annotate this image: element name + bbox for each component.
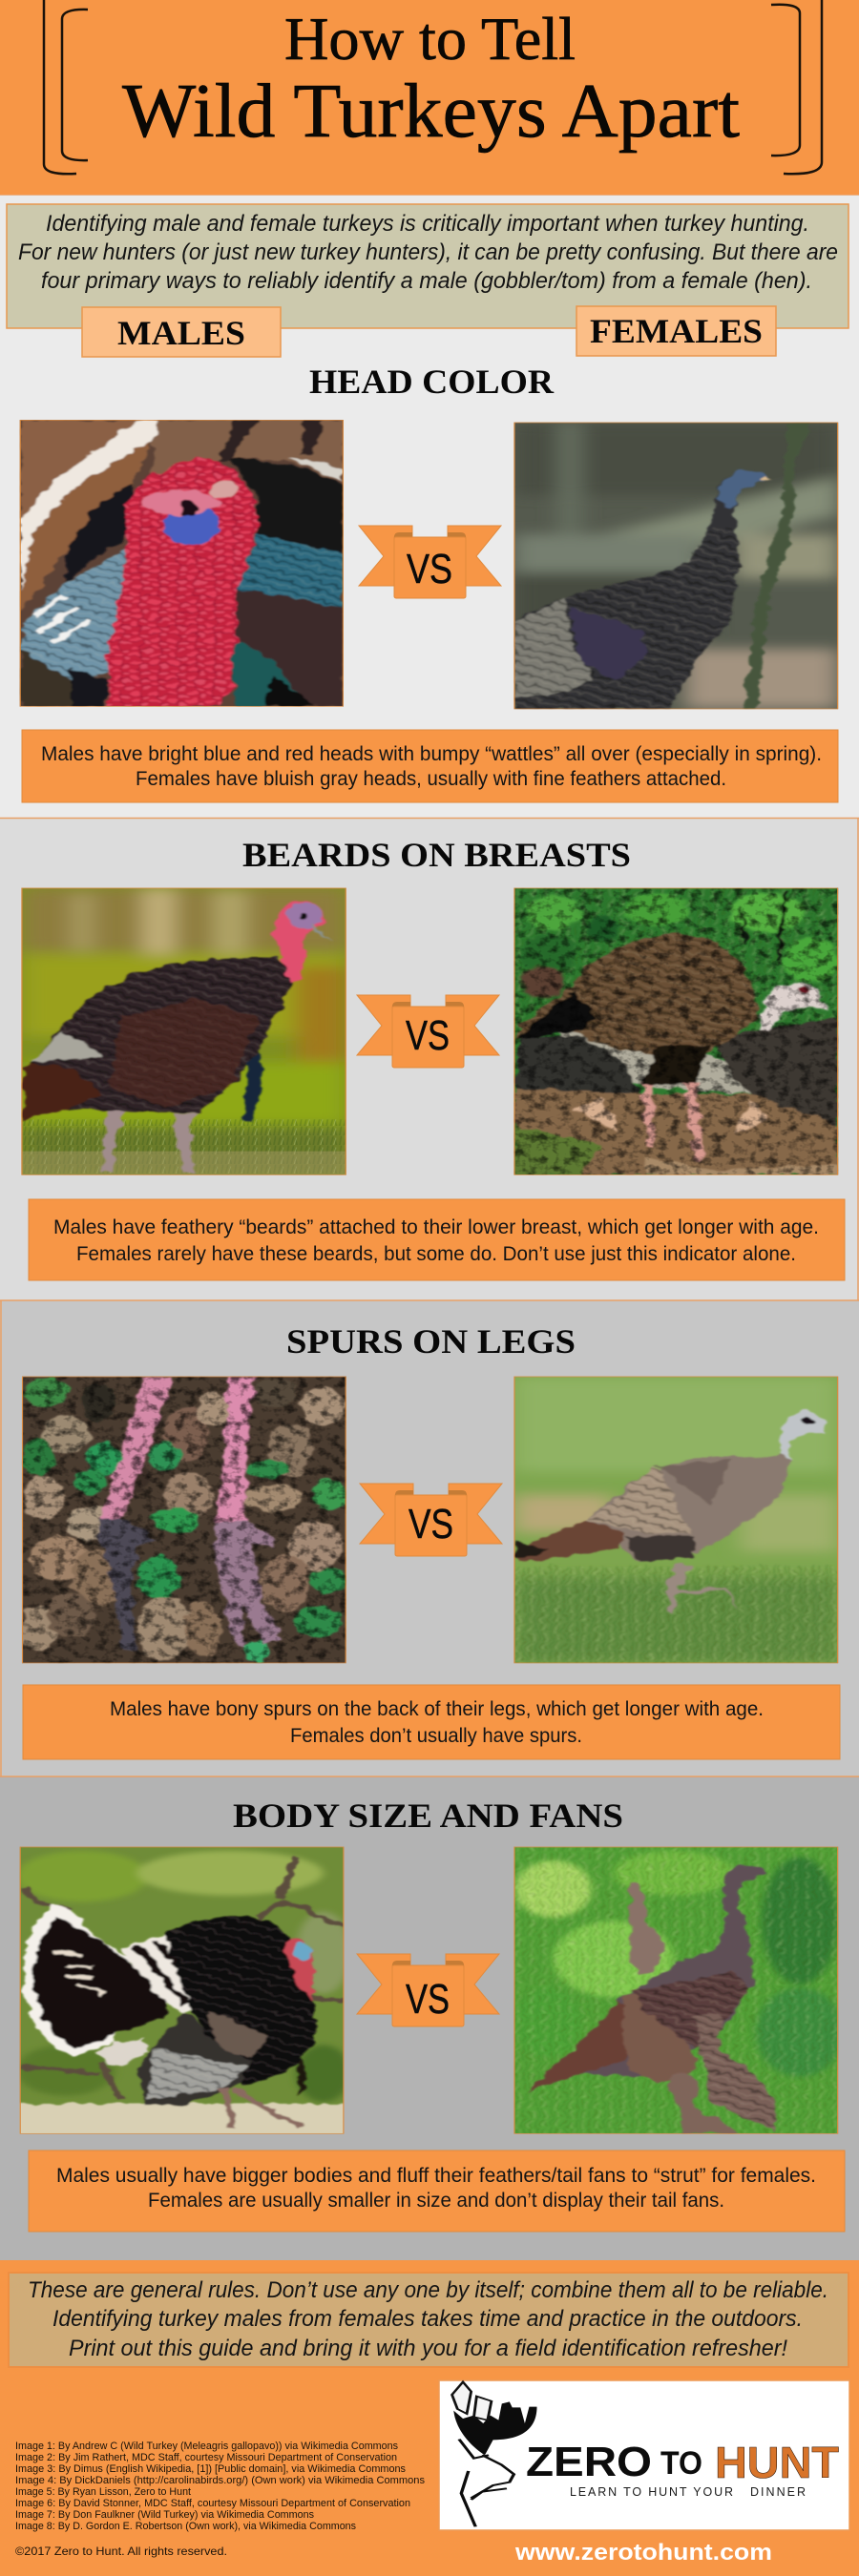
closing advice panel xyxy=(9,2273,849,2367)
vs ribbon xyxy=(357,1954,499,2026)
heading: body size: BODY SIZE AND FANS xyxy=(233,1797,623,1835)
photo border xyxy=(513,1377,838,1663)
photo: male turkey standing xyxy=(21,888,346,1175)
caption: body size: Females are usually smaller in size and don’t display their tail fans. xyxy=(148,2190,724,2212)
males label: MALES xyxy=(117,314,245,352)
image credits: Image 2: By Jim Rathert, MDC Staff, courtesy Missouri Department of Conservation xyxy=(15,2452,397,2463)
photo border xyxy=(513,1847,838,2134)
header banner xyxy=(0,0,859,195)
vs ribbon: VS xyxy=(409,1501,453,1548)
logo panel: LEARN TO HUNT YOUR xyxy=(570,2485,733,2499)
logo panel: TO xyxy=(660,2445,702,2482)
image credits xyxy=(15,2441,425,2532)
logo panel xyxy=(439,2380,849,2530)
intro panel: four primary ways to reliably identify a male (gobbler/tom) from a female (hen). xyxy=(41,268,812,294)
website url: www.zerotohunt.com xyxy=(514,2540,772,2566)
image credits: Image 3: By Dimus (English Wikipedia, [1]) [Public domain], via Wikimedia Commons xyxy=(15,2463,406,2475)
females label xyxy=(576,306,776,356)
photo border xyxy=(20,420,344,707)
intro panel: Identifying male and female turkeys is critically important when turkey hunting. xyxy=(46,211,809,237)
closing advice panel: Identifying turkey males from females takes time and practice in the outdoors. xyxy=(52,2306,803,2332)
caption: body size xyxy=(29,2150,845,2232)
intro panel: For new hunters (or just new turkey hunters), it can be pretty confusing. But there are xyxy=(18,239,838,265)
closing advice panel: Print out this guide and bring it with you for a field identification refresher! xyxy=(69,2336,787,2361)
image credits: Image 7: By Don Faulkner (Wild Turkey) via Wikimedia Commons xyxy=(15,2509,314,2521)
leaf mottling xyxy=(22,1377,346,1663)
photo: turkey legs with spurs xyxy=(20,1377,347,1663)
photo border xyxy=(22,1377,346,1663)
icon: deer with skyline antlers xyxy=(452,2382,537,2526)
intro panel xyxy=(7,204,849,328)
image credits: Image 5: By Ryan Lisson, Zero to Hunt xyxy=(15,2486,191,2498)
caption: beards: Females rarely have these beards, but some do. Don’t use just this indicator alone. xyxy=(76,1243,796,1265)
caption: head color: Males have bright blue and red heads with bumpy “wattles” all over (especially in spring). xyxy=(41,743,822,765)
caption: spurs: Females don’t usually have spurs. xyxy=(290,1725,582,1747)
photo border xyxy=(513,423,838,709)
title line 2: Wild Turkeys Apart xyxy=(122,70,740,154)
logo panel: HUNT xyxy=(715,2438,839,2487)
image credits: Image 1: By Andrew C (Wild Turkey (Meleagris gallopavo)) via Wikimedia Commons xyxy=(15,2441,398,2452)
heading: head color: HEAD COLOR xyxy=(309,363,555,401)
vs ribbon: VS xyxy=(407,546,452,592)
photo border xyxy=(513,888,838,1175)
heading: spurs: SPURS ON LEGS xyxy=(286,1322,576,1361)
closing advice panel: These are general rules. Don’t use any one by itself; combine them all to be reliable. xyxy=(28,2277,828,2303)
caption: head color xyxy=(22,730,838,802)
vs ribbon: VS xyxy=(406,1976,450,2023)
vs ribbon: VS xyxy=(406,1012,450,1059)
photo border xyxy=(21,888,346,1175)
photo: female turkey foraging xyxy=(513,888,838,1175)
image credits: Image 4: By DickDaniels (http://carolinabirds.org/) (Own work) via Wikimedia Commons xyxy=(15,2475,425,2486)
caption: spurs xyxy=(23,1685,840,1759)
image credits: Image 6: By David Stonner, MDC Staff, courtesy Missouri Department of Conservation xyxy=(15,2498,410,2509)
image credits: Image 8: By D. Gordon E. Robertson (Own work), via Wikimedia Commons xyxy=(15,2521,356,2532)
caption: beards xyxy=(29,1199,845,1280)
females label: FEMALES xyxy=(590,312,763,350)
photo: strutting male xyxy=(19,1847,344,2134)
males label xyxy=(82,307,281,357)
photo: female turkey neck and head xyxy=(513,423,838,709)
photo: hen with poults xyxy=(513,1847,844,2134)
leaf mottling xyxy=(513,888,838,1175)
decorative brackets xyxy=(44,0,822,174)
photo border xyxy=(20,1847,344,2134)
caption: beards: Males have feathery “beards” attached to their lower breast, which get longer with age. xyxy=(53,1216,819,1238)
vs ribbon xyxy=(360,1484,502,1556)
copyright: ©2017 Zero to Hunt. All rights reserved. xyxy=(15,2545,227,2558)
logo panel: DINNER xyxy=(750,2485,806,2499)
caption: head color: Females have bluish gray heads, usually with fine feathers attached. xyxy=(136,768,726,790)
photo: male turkey head xyxy=(20,420,344,707)
vs ribbon xyxy=(359,526,501,598)
caption: body size: Males usually have bigger bodies and fluff their feathers/tail fans to “strut” for females. xyxy=(56,2165,816,2187)
logo wordmark: ZERO xyxy=(526,2439,652,2485)
title line 1: How to Tell xyxy=(284,5,576,73)
caption: spurs: Males have bony spurs on the back of their legs, which get longer with age. xyxy=(110,1698,764,1720)
vs ribbon xyxy=(357,995,499,1068)
heading: beards: BEARDS ON BREASTS xyxy=(242,836,631,874)
photo: female in grass xyxy=(513,1377,838,1663)
